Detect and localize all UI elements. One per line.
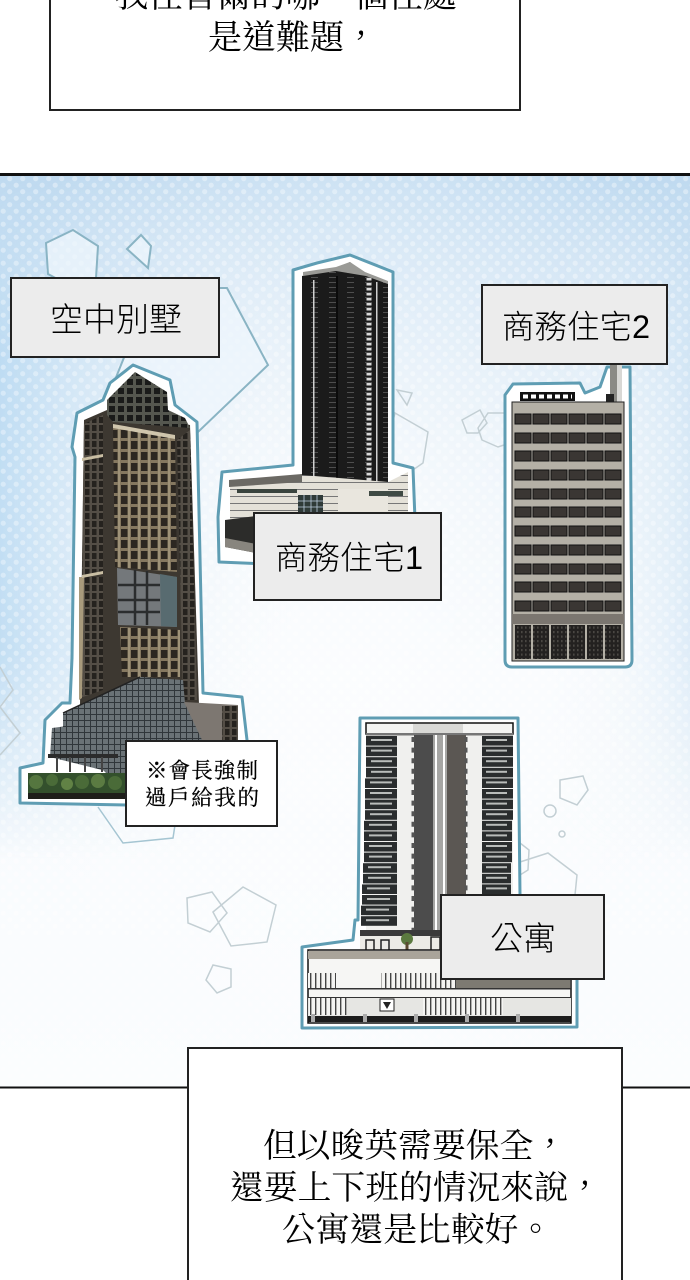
podium xyxy=(308,950,571,1023)
label: sky villa xyxy=(11,278,219,357)
panel bottom area xyxy=(0,1087,690,1280)
narration box: top xyxy=(50,0,520,110)
building: residential-commercial tower 1 xyxy=(218,255,415,570)
panel frame lines xyxy=(0,173,690,1088)
label: sky villa: 空中別墅 xyxy=(50,301,182,338)
building: sky villa tower xyxy=(20,365,247,805)
panel: illustrated sky background xyxy=(0,176,690,855)
balconies xyxy=(361,736,513,926)
label: residential-commercial 2: 商務住宅2 xyxy=(502,309,650,345)
label: apartment xyxy=(441,895,604,979)
narration box: bottom: 但以晙英需要保全， xyxy=(263,1127,567,1165)
decorative hexagon shapes xyxy=(0,230,588,993)
narration box: top: 是道難題， xyxy=(208,19,378,57)
label: apartment: 公寓 xyxy=(490,920,556,957)
callout: note about transferred villa xyxy=(126,741,277,826)
label: residential-commercial 1: 商務住宅1 xyxy=(275,540,423,576)
building: apartment complex xyxy=(302,718,577,1028)
label: residential-commercial 2 xyxy=(482,285,667,364)
icon: trees and ground xyxy=(28,773,128,799)
lobby xyxy=(360,930,442,957)
label: residential-commercial 1 xyxy=(254,513,441,600)
ground floor windows xyxy=(515,625,621,659)
narration box: bottom: 公寓還是比較好。 xyxy=(282,1211,552,1249)
building: residential-commercial tower 2 xyxy=(505,365,632,667)
narration box: bottom: 還要上下班的情況來說， xyxy=(230,1169,602,1207)
callout: note about transferred villa: 過戶給我的 xyxy=(145,786,259,810)
window rows xyxy=(515,414,621,611)
callout: note about transferred villa: ※會長強制 xyxy=(146,759,258,783)
narration box: bottom xyxy=(188,1048,622,1280)
